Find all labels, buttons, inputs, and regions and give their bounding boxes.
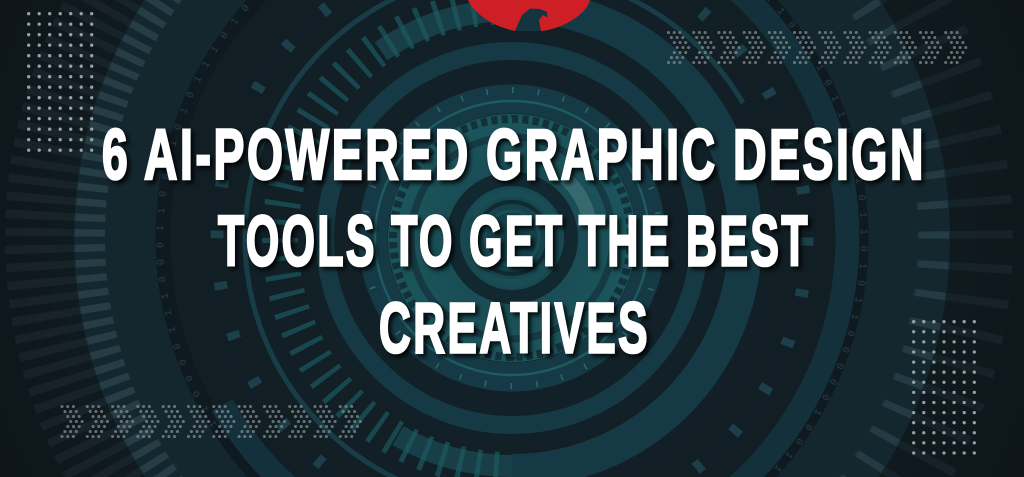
- outer bright ticks left: [75, 0, 182, 477]
- sparse small ticks: [217, 0, 807, 477]
- ticked ring: [373, 99, 651, 377]
- inner dark ring: [411, 137, 613, 339]
- dot grid bottom right: [914, 322, 974, 455]
- dot grid top left: [29, 14, 92, 152]
- wide teal ring right half: [512, 5, 745, 471]
- left tick ring: [280, 6, 512, 470]
- dotted chevrons top right: [668, 32, 966, 62]
- title: [102, 116, 926, 368]
- inner arcs: [467, 193, 557, 283]
- dotted chevrons bottom left: [62, 406, 361, 436]
- teal band right and lower left: [222, 0, 847, 477]
- thin ring upper right: [625, 0, 743, 103]
- outer radial ticks right: [840, 0, 1013, 477]
- icon: red eagle logo: [468, 0, 590, 31]
- teal ring: [325, 51, 699, 425]
- outer bright ticks right: [842, 0, 949, 477]
- teal arcs behind ticks: [375, 3, 512, 477]
- thin ring left: [242, 0, 398, 477]
- outer light band: [116, 0, 908, 477]
- highlight arc: [565, 178, 589, 218]
- binary band: [163, 0, 861, 477]
- title line 3: CREATIVES: [379, 290, 650, 368]
- outer radial ticks left: [5, 0, 177, 477]
- center disc: [388, 114, 636, 362]
